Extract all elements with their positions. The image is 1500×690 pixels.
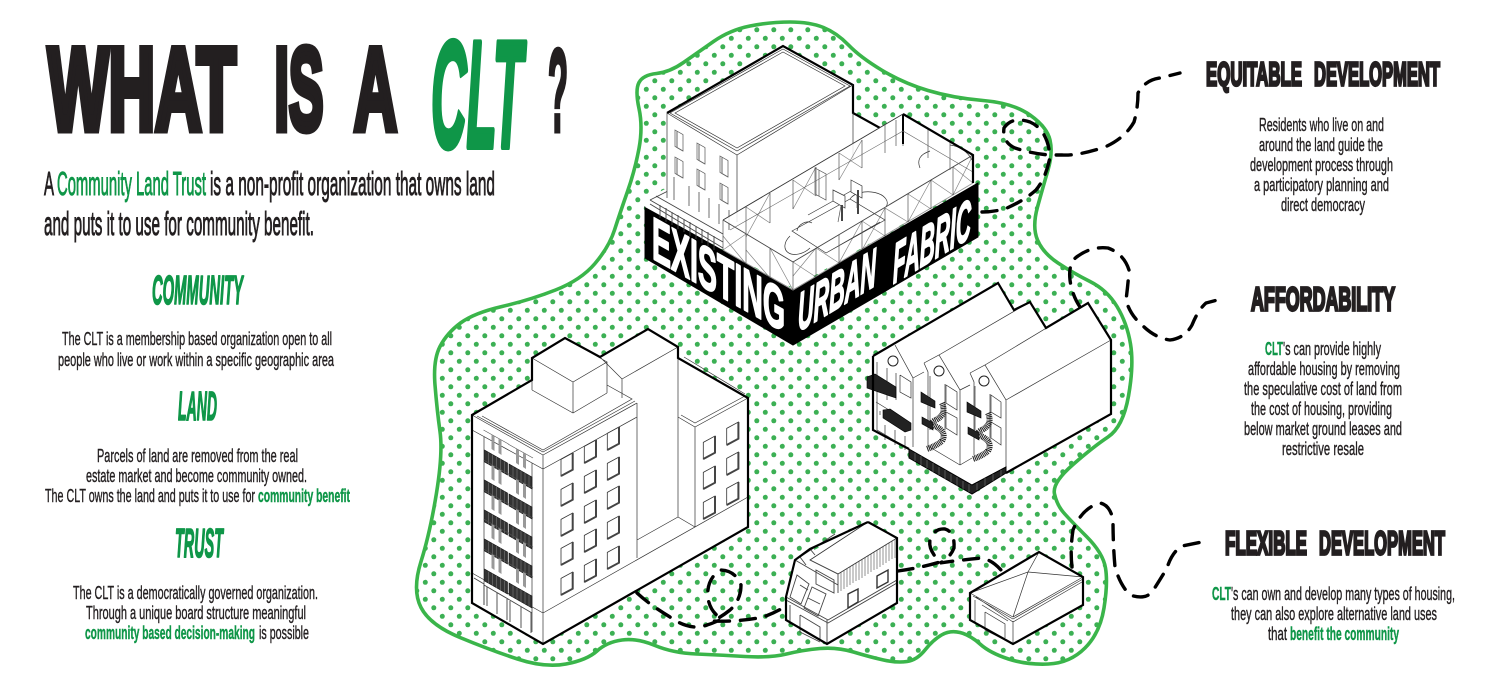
text: CLT	[431, 10, 527, 180]
striped base	[909, 449, 1006, 494]
section: equitable development	[1206, 56, 1440, 215]
outline	[786, 522, 897, 644]
thick outline	[873, 283, 1111, 473]
building: tall apartment block	[472, 329, 748, 644]
building: row houses	[867, 283, 1111, 494]
outline	[970, 552, 1083, 644]
text: trust description	[73, 583, 318, 643]
text: community description: people who live or work within a specific geographic area	[58, 350, 335, 370]
storefront	[474, 578, 532, 633]
dashed connector: between tall building and house	[637, 570, 786, 627]
text: equitable description: Residents who live on and	[1259, 115, 1384, 135]
small house body	[786, 522, 897, 644]
house windows and details	[876, 356, 1001, 450]
text: affordability description: restrictive resale	[1282, 439, 1364, 459]
section: trust	[73, 520, 318, 643]
title: What is a CLT?: IS	[274, 24, 324, 154]
basketball court lines	[723, 114, 973, 262]
text: land description: estate market and become community owned.	[86, 466, 307, 486]
text: affordability description: below market ground leases and	[1244, 419, 1402, 439]
chain link fence frame	[723, 114, 973, 290]
house body	[970, 552, 1083, 644]
text: equitable description	[1250, 115, 1393, 215]
text: affordability description: the speculative cost of land from	[1244, 379, 1402, 399]
intro text: A	[44, 165, 54, 202]
text: is a non-profit organization that owns land	[210, 165, 495, 202]
section: community	[58, 267, 335, 370]
text: equitable description: a participatory planning and	[1254, 175, 1389, 195]
block windows	[674, 130, 729, 230]
title: What is a CLT?	[48, 10, 568, 180]
dashed connector: affordability	[1070, 248, 1225, 340]
text: affordability description: 's can provide highly	[1283, 339, 1381, 359]
text: land description: Parcels of land are removed from the real	[97, 446, 298, 466]
green dotted land blob	[416, 22, 1132, 665]
text: trust description: The CLT is a democratically governed organization.	[73, 583, 318, 603]
white base platform	[645, 112, 973, 288]
black plinth	[645, 183, 978, 345]
section: land: LAND	[178, 383, 217, 429]
text: community description	[58, 329, 335, 370]
text: ?	[548, 25, 568, 156]
text: flexible description: CLT	[1212, 584, 1231, 604]
text: FABRIC	[893, 186, 971, 296]
text: flexible description: benefit the community	[1290, 624, 1399, 644]
text: trust description: community based decision-making	[85, 623, 255, 643]
dashed connector: equitable development	[982, 73, 1180, 212]
text: land description: community benefit	[258, 486, 350, 506]
title word: WHAT: WHAT	[48, 24, 236, 154]
block body	[472, 329, 748, 644]
text: trust description: Through a unique board structure meaningful	[86, 603, 306, 623]
striped dormer wall	[838, 538, 897, 593]
building: small modern house	[786, 522, 897, 644]
text: affordability description	[1244, 339, 1402, 459]
row house body	[873, 283, 1111, 494]
low ledge with ticks	[650, 190, 723, 250]
outer thick outline	[472, 329, 748, 644]
section: affordability	[1244, 280, 1402, 459]
balconies	[484, 430, 533, 608]
section: flexible development	[1212, 524, 1455, 644]
section: community: COMMUNITY	[152, 267, 244, 313]
dashed connector: flexible development	[1071, 503, 1202, 597]
thin structural lines	[472, 338, 748, 644]
text: equitable description: around the land guide the	[1259, 135, 1383, 155]
dashed connector: between houses	[898, 529, 1001, 571]
building: existing urban fabric: URBAN	[798, 237, 877, 344]
main block	[667, 46, 853, 240]
section: trust: TRUST	[175, 520, 224, 566]
text: trust description: is possible	[259, 623, 309, 643]
street-facing windows	[561, 422, 738, 595]
heading: flexible development: FLEXIBLE	[1225, 524, 1307, 562]
intro text: and puts it to use for community benefit.	[44, 205, 314, 242]
text: equitable description: development process through	[1250, 155, 1393, 175]
intro text	[44, 165, 495, 242]
text: flexible description	[1212, 584, 1455, 644]
roof lines	[970, 552, 1083, 644]
roof	[810, 522, 897, 574]
title word: A: A	[354, 24, 397, 154]
facade details	[786, 534, 897, 644]
building: existing urban fabric: EXISTING	[652, 204, 785, 345]
balconies	[867, 374, 981, 440]
heading: equitable development: EQUITABLE	[1206, 56, 1302, 92]
building: hip roof house	[970, 552, 1083, 644]
intro text: Community Land Trust	[57, 165, 206, 202]
text: community description: The CLT is a membership based organization open to all	[62, 329, 332, 349]
text: equitable description: direct democracy	[1281, 195, 1365, 215]
side windows	[848, 570, 888, 608]
text: affordability description: affordable housing by removing	[1248, 359, 1400, 379]
roof and gable lines	[895, 302, 1111, 485]
section: land	[45, 383, 350, 506]
text: land description	[45, 446, 350, 506]
text: land description: The CLT owns the land and puts it to use for	[45, 486, 255, 506]
text: affordability description: CLT	[1265, 339, 1283, 359]
building: existing urban fabric	[645, 46, 978, 345]
text: affordability description: the cost of housing, providing	[1251, 399, 1392, 419]
spiral stairs	[927, 403, 990, 459]
text: flexible description: that	[1268, 624, 1287, 644]
